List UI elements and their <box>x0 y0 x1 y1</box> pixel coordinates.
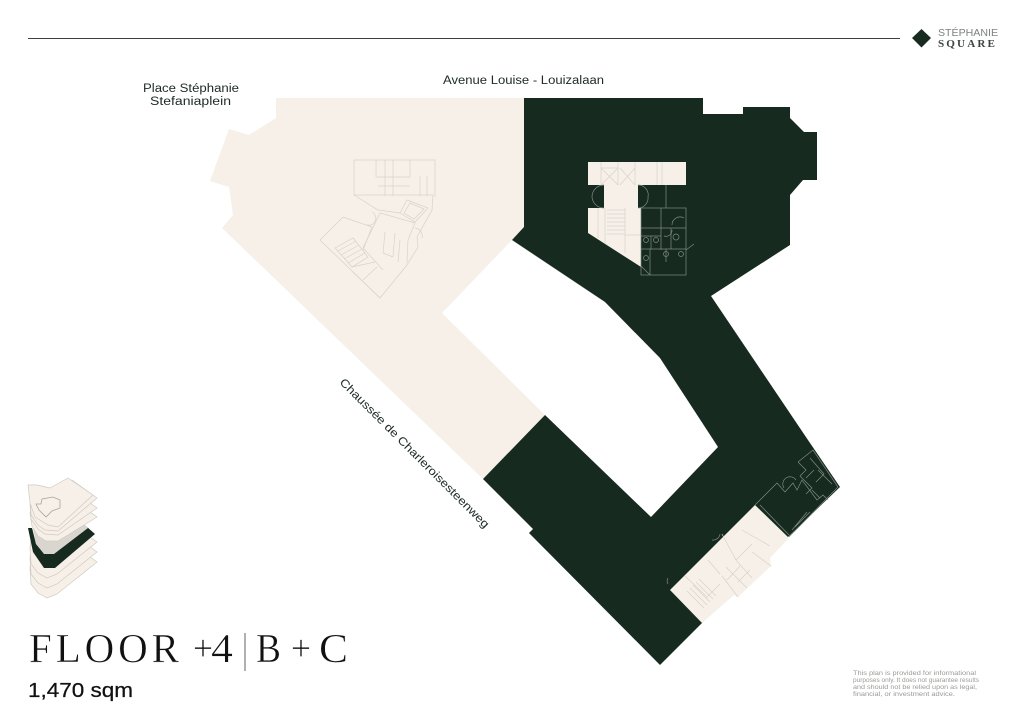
floor title: B <box>256 625 281 671</box>
floor title: + <box>291 628 311 668</box>
stacked floors thumbnail <box>28 478 97 598</box>
label: Avenue Louise: Avenue Louise - Louizalaan <box>443 75 604 87</box>
floor title: FLOOR <box>29 625 180 671</box>
floor title <box>29 625 348 671</box>
disclaimer <box>853 671 979 698</box>
highlighted plate <box>28 527 95 568</box>
core B: beige block <box>670 505 789 623</box>
core A linework <box>592 162 694 275</box>
header rule <box>28 38 900 40</box>
label: Place Stéphanie <box>143 83 239 108</box>
disclaimer: financial, or investment advice. <box>853 692 955 698</box>
floor title: + <box>193 628 213 668</box>
label: Place Stéphanie: Stefaniaplein <box>150 96 231 108</box>
label: Chaussée de Charleroisesteenweg: Chaussée de Charleroisesteenweg <box>337 377 491 531</box>
floor plan: dark leased area <box>483 98 840 665</box>
floor title: 4 <box>211 625 233 671</box>
beige core linework <box>320 160 435 298</box>
area figure: 1,470 sqm <box>28 680 133 702</box>
floor plan: beige unlet area <box>210 98 545 479</box>
floor title: C <box>319 625 348 671</box>
disclaimer: This plan is provided for informational <box>853 671 976 677</box>
disclaimer: and should not be relied upon as legal, <box>853 685 977 691</box>
core B linework <box>667 450 838 608</box>
label: Place Stéphanie: Place Stéphanie <box>143 83 239 95</box>
upper plates <box>30 499 97 541</box>
lower plates <box>30 544 97 598</box>
logo: STÉPHANIE <box>938 26 998 39</box>
disclaimer: purposes only. It does not guarantee results <box>853 678 979 684</box>
logo: SQUARE <box>938 39 997 50</box>
core A: beige block <box>588 162 686 267</box>
logo <box>912 26 998 50</box>
